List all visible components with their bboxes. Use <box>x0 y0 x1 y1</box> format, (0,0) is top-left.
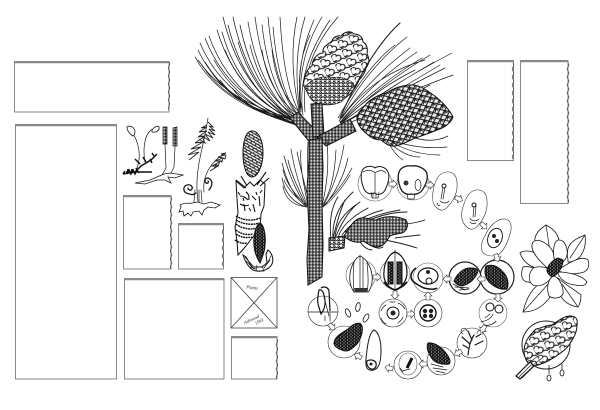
cone on side branch <box>344 217 407 247</box>
stage: dark cone bottom <box>427 343 455 375</box>
side branch stub <box>329 236 345 251</box>
fruit lobes <box>524 316 577 366</box>
fruit stalk <box>516 362 534 379</box>
cycle arrows <box>326 180 502 373</box>
placeholder text: top: Plants <box>245 284 258 291</box>
panel: top right narrow <box>468 60 514 160</box>
empty label panels <box>14 60 569 379</box>
fruit seeds <box>547 364 564 381</box>
stage: embryo egg 1 <box>432 172 457 210</box>
stem with spurs <box>290 103 356 146</box>
placeholder text: bottom: 1993 <box>254 317 265 326</box>
stage: seed cone scale <box>346 255 376 292</box>
clubmoss strobili <box>163 127 177 146</box>
female cone <box>357 85 453 146</box>
male cone <box>303 32 369 105</box>
stage: seedling circle <box>394 351 422 379</box>
sepal leaves <box>523 225 585 312</box>
flower centre <box>547 258 563 276</box>
petals <box>520 240 589 298</box>
stage: open sporophyll <box>380 250 410 290</box>
clubmoss rhizome <box>135 173 183 184</box>
needles on side branch <box>330 192 425 250</box>
trunk <box>307 138 323 285</box>
small winged seeds <box>344 302 370 323</box>
placeholder text: bottom: Ashmead <box>242 313 261 326</box>
magnolia flower <box>520 225 589 312</box>
stage: branching sprout <box>457 328 487 358</box>
cycad trunk <box>235 180 265 255</box>
moss gametophyte <box>123 153 157 174</box>
panel: crossed photo placeholder <box>231 278 277 330</box>
panel: top right tall <box>520 60 569 204</box>
panel: wide top-left <box>14 62 170 112</box>
stage: megaspore mother cell <box>411 263 443 293</box>
stage: dark ovule left <box>449 262 481 294</box>
fern drawing <box>179 118 226 216</box>
stage: spore circle target <box>379 299 407 327</box>
panel: small below fern <box>178 224 224 269</box>
fiddleheads <box>184 178 212 195</box>
fern roots <box>179 202 220 216</box>
stage: dark female cone circle <box>328 323 362 358</box>
cycad cone <box>243 131 263 177</box>
panel: tall left <box>16 124 116 379</box>
needles below female cone <box>388 136 448 160</box>
magnolia fruit cone <box>516 316 577 381</box>
stage: embryo egg 3 <box>481 219 511 256</box>
moss stalks and capsules <box>132 129 153 168</box>
stage: spirals branch <box>479 299 507 327</box>
life cycle diagram <box>308 166 514 379</box>
small cycad cone <box>243 250 273 271</box>
stage: seed halves A <box>358 166 392 201</box>
stage: seed halves B <box>397 166 429 200</box>
needles: lower fascicle on stem <box>282 130 352 207</box>
panel: large square <box>124 278 224 379</box>
fruit backing circle <box>522 321 570 369</box>
needles: upper left fascicle <box>195 17 338 125</box>
stage: four spores circle <box>414 299 442 327</box>
stage: long seed <box>366 330 381 370</box>
moss and clubmoss drawing <box>123 126 183 184</box>
stage: embryo egg 2 <box>462 190 487 229</box>
second frond <box>204 153 226 192</box>
panel: small bottom <box>232 336 278 379</box>
panel: medium below moss <box>124 196 172 269</box>
needles: right fascicle <box>338 23 453 125</box>
pine branch drawing <box>195 17 453 285</box>
cycad drawing <box>235 131 273 271</box>
stage: pollen seedling circle <box>308 287 338 326</box>
main frond <box>197 118 208 190</box>
stage: dark ovule right <box>480 260 514 294</box>
